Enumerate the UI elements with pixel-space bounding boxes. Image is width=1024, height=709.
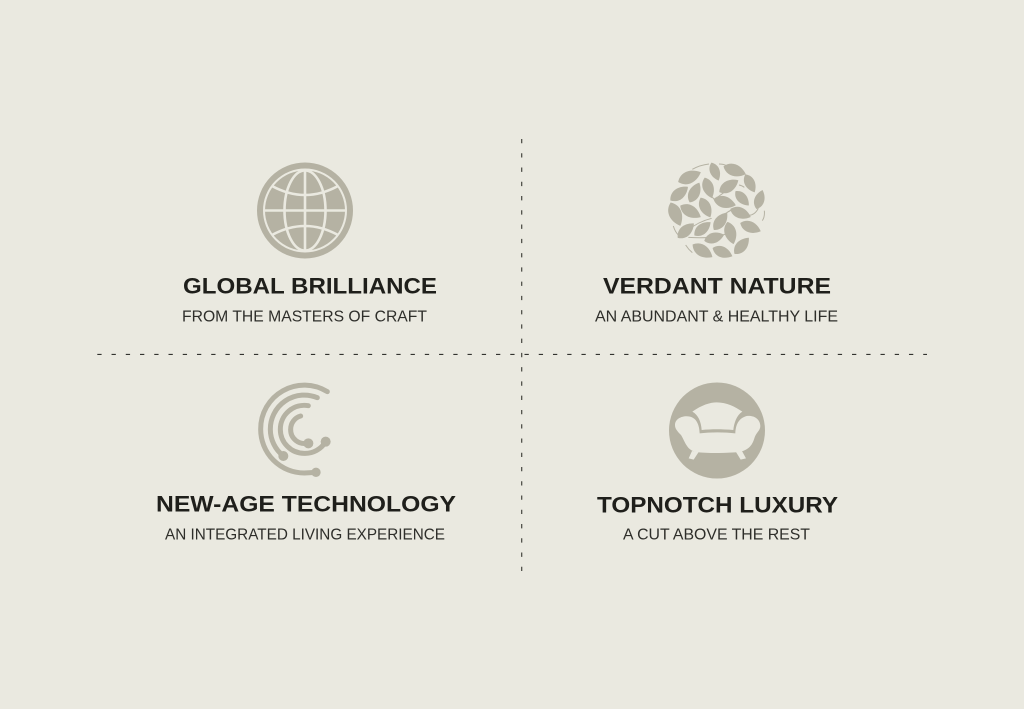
- text: a cut above the rest: A CUT ABOVE THE REST: [623, 526, 811, 544]
- panel: verdant nature: [595, 161, 838, 326]
- icon: leaf circle: [665, 161, 767, 262]
- heading: topnotch luxury: TOPNOTCH LUXURY: [597, 492, 838, 518]
- panel: new-age technology: [156, 385, 456, 544]
- text: from the masters of craft: FROM THE MASTERS OF CRAFT: [182, 308, 428, 326]
- icon: globe: [260, 166, 350, 256]
- icon: armchair in circle: [669, 382, 765, 478]
- text: an integrated living experience: AN INTEGRATED LIVING EXPERIENCE: [165, 526, 445, 544]
- heading: new-age technology: NEW-AGE TECHNOLOGY: [156, 492, 456, 516]
- heading: global brilliance: GLOBAL BRILLIANCE: [183, 274, 437, 298]
- text: an abundant and healthy life: AN ABUNDANT & HEALTHY LIFE: [595, 308, 838, 326]
- panel: global brilliance: [182, 166, 437, 326]
- icon: concentric arcs: [261, 385, 331, 477]
- panel: topnotch luxury: [597, 382, 838, 544]
- heading: verdant nature: VERDANT NATURE: [603, 274, 831, 298]
